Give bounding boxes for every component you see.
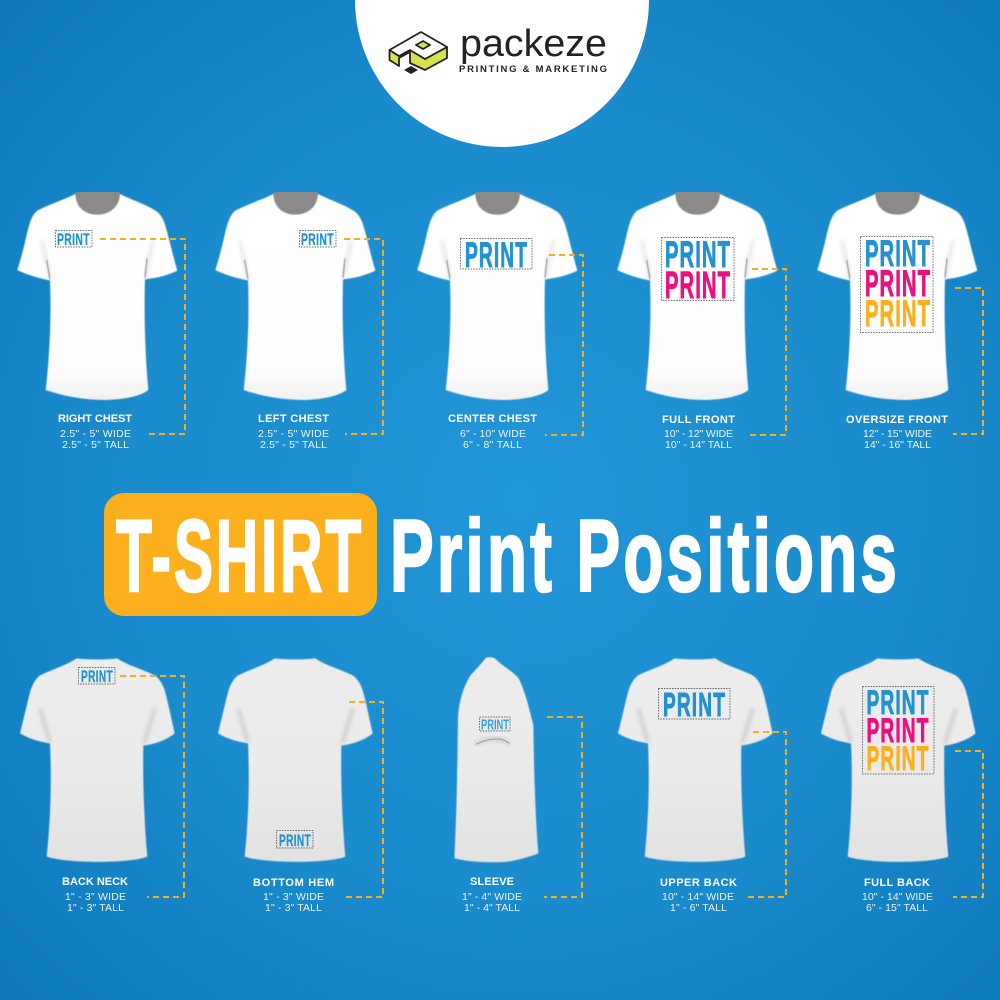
label (448, 413, 537, 451)
label (846, 414, 948, 451)
panel: center chest (417, 192, 583, 451)
label: 1" - 4" WIDE (462, 891, 522, 903)
leader line (345, 702, 383, 897)
print box: PRINT (665, 234, 731, 275)
label (258, 413, 329, 451)
panel: bottom hem (218, 658, 383, 914)
logo tagline: PRINTING & MARKETING (459, 64, 607, 75)
print box: PRINT (866, 684, 930, 722)
leader line (748, 269, 786, 435)
label: 6" - 15" TALL (866, 902, 928, 914)
logo badge (355, 0, 649, 147)
print box: PRINT (301, 231, 334, 249)
print box (460, 236, 532, 275)
label: BACK NECK (62, 876, 128, 888)
print box (78, 668, 115, 686)
label: 10" - 14" TALL (665, 439, 732, 451)
title text: T-SHIRT: T-SHIRT (116, 499, 364, 613)
print box (860, 233, 933, 334)
panel: oversize front (817, 192, 983, 451)
leader line (344, 239, 383, 434)
side shirt (454, 657, 538, 862)
label: 2.5" - 5" WIDE (60, 428, 131, 440)
label: LEFT CHEST (258, 413, 329, 425)
label (862, 877, 933, 914)
label: 1" - 3" WIDE (65, 891, 126, 903)
panel: sleeve (454, 657, 582, 914)
label (660, 877, 737, 914)
label (662, 414, 735, 451)
print box: PRINT (57, 231, 90, 249)
title pill (104, 493, 377, 616)
label: 2.5" - 5" TALL (62, 439, 129, 451)
label: 10" - 12" WIDE (664, 428, 733, 440)
print box: PRINT (481, 718, 509, 734)
label: 6" - 10" WIDE (460, 428, 526, 440)
label (253, 877, 334, 914)
label: RIGHT CHEST (58, 413, 132, 425)
label (462, 876, 522, 914)
print box (300, 230, 336, 249)
leader line (100, 239, 185, 434)
label: 1" - 6" TALL (670, 902, 727, 914)
label: OVERSIZE FRONT (846, 414, 948, 426)
panel: full back (821, 658, 983, 914)
panel: left chest (215, 192, 383, 451)
label: 1" - 3" WIDE (263, 891, 324, 903)
leader line (544, 717, 582, 897)
label: SLEEVE (470, 876, 514, 888)
print box: PRINT (663, 686, 726, 723)
label (58, 413, 132, 451)
panel: right chest (17, 192, 185, 451)
print box (276, 830, 313, 850)
label: FULL FRONT (662, 414, 735, 426)
label: 2.5" - 5" WIDE (258, 428, 329, 440)
panel: upper back (618, 658, 786, 914)
leader line (953, 751, 983, 897)
leader line (545, 255, 583, 435)
print box: PRINT (81, 668, 113, 686)
print box: PRINT (279, 831, 311, 850)
leader line (953, 288, 983, 434)
label: 14" - 16" TALL (864, 439, 931, 451)
logo wordmark: packeze (460, 23, 607, 65)
print box: PRINT (865, 293, 931, 334)
print box: PRINT (866, 712, 930, 750)
label: 1" - 3" TALL (67, 902, 124, 914)
print box (658, 686, 730, 723)
print box: PRINT (665, 265, 731, 307)
panel: full front (617, 192, 786, 451)
label: BOTTOM HEM (253, 877, 334, 889)
leader line (120, 676, 184, 897)
icon: packeze isometric logo (390, 32, 447, 74)
print box (480, 717, 510, 734)
print box: PRINT (865, 233, 931, 274)
print box (662, 234, 734, 307)
label: 6" - 8" TALL (463, 439, 522, 451)
label: 2.5" - 5" TALL (260, 439, 327, 451)
label: 10" - 14" WIDE (662, 891, 734, 903)
print box: PRINT (465, 236, 528, 275)
label: UPPER BACK (660, 877, 737, 889)
panel: back neck (20, 658, 184, 914)
label: CENTER CHEST (448, 413, 537, 425)
print box (56, 230, 92, 249)
label: 12" - 15" WIDE (863, 428, 932, 440)
print box (862, 684, 934, 778)
label: 10" - 14" WIDE (862, 891, 933, 903)
label: FULL BACK (864, 877, 930, 889)
print box: PRINT (866, 740, 930, 778)
leader line (748, 732, 786, 897)
label (62, 876, 128, 914)
label: 1" - 4" TALL (464, 902, 520, 914)
title (104, 493, 900, 616)
label: 1" - 3" TALL (265, 902, 322, 914)
print box: PRINT (865, 263, 931, 304)
